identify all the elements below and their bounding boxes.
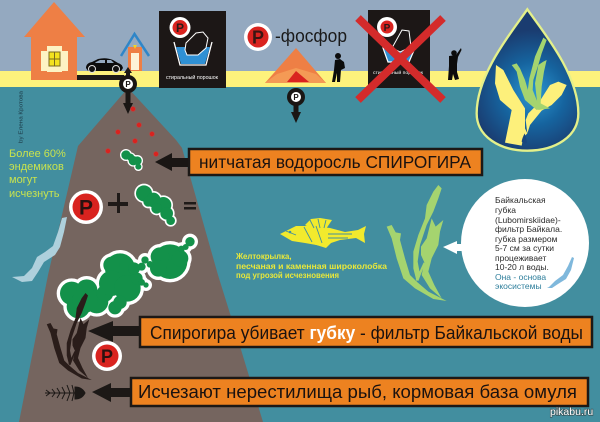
text: endemics warning: эндемиков bbox=[9, 161, 64, 173]
icon: hiker bbox=[332, 53, 345, 82]
watermark: pikabu.ru bbox=[550, 406, 593, 418]
callout: Baikal sponge info: Она - основа bbox=[495, 272, 546, 282]
arrow: sponge info bbox=[443, 241, 475, 254]
icon: fish skeleton bbox=[45, 385, 85, 401]
icon: large spirogyra bbox=[60, 237, 195, 318]
label: sponge bbox=[140, 317, 592, 347]
icon: phosphorus sign: P bbox=[252, 28, 264, 48]
icon: phosphorus marker from tent bbox=[287, 88, 305, 123]
icon: phosphorus circle lower: P bbox=[101, 346, 113, 366]
icon: detergent box bbox=[159, 11, 226, 88]
icon: dead sponge bbox=[47, 293, 92, 380]
arrow: to sponge label bbox=[88, 321, 140, 342]
callout: Baikal sponge info: экосистемы bbox=[495, 281, 542, 291]
legend: phosphorus: -фосфор bbox=[275, 26, 347, 46]
plus sign bbox=[108, 193, 128, 213]
pollution plume bbox=[19, 88, 263, 422]
label: spawning grounds bbox=[131, 378, 588, 406]
icon: large house bbox=[24, 2, 85, 80]
icon: Baikal map left bbox=[12, 217, 67, 282]
label: sponge: Спирогира убивает губку - фильтр Байкальской воды bbox=[150, 323, 583, 343]
text: fish warning: под угрозой исчезновения bbox=[236, 271, 339, 280]
icon: tent bbox=[265, 48, 326, 83]
arrow: to spirogyra label bbox=[155, 153, 190, 171]
icon: yellow fish bbox=[280, 218, 366, 248]
callout: Baikal sponge info: Байкальская bbox=[495, 195, 546, 205]
callout: Baikal sponge info: 5-7 см за сутки bbox=[495, 243, 554, 253]
callout: Baikal sponge info: фильтр Байкала. bbox=[495, 224, 562, 234]
icon: crossed-out detergent box: стиральный порошок bbox=[373, 69, 423, 75]
icon: phosphorus marker from tent: P bbox=[293, 93, 299, 102]
equals sign bbox=[184, 202, 196, 210]
lake water bbox=[0, 87, 600, 422]
icon: phosphorus circle lower bbox=[92, 341, 122, 371]
label: spirogyra: нитчатая водоросль СПИРОГИРА bbox=[199, 152, 471, 172]
text: fish warning: песчаная и каменная широколобка bbox=[236, 262, 388, 271]
text: endemics warning bbox=[9, 148, 66, 200]
icon: crossed-out detergent box bbox=[358, 10, 443, 100]
icon: crossed-out detergent box: P bbox=[384, 23, 391, 34]
icon: water drop with hands and algae bbox=[477, 9, 578, 151]
credit: by Елена Кротова bbox=[18, 90, 24, 143]
text: fish warning: Желтокрылка, bbox=[235, 252, 292, 261]
icon: medium spirogyra bbox=[134, 184, 177, 227]
icon: small spirogyra bbox=[120, 149, 143, 171]
callout: Baikal sponge info: процеживает bbox=[495, 253, 546, 263]
label: стиральный порошок bbox=[166, 74, 219, 81]
icon: healthy sponge bbox=[387, 185, 447, 301]
callout: Baikal sponge info: (Lubomirskiidae)- bbox=[495, 215, 561, 225]
callout: Baikal sponge info bbox=[461, 179, 589, 307]
callout: Baikal sponge info: губка размером bbox=[495, 234, 558, 244]
icon: detergent box: P bbox=[176, 21, 184, 35]
text: endemics warning: исчезнуть bbox=[9, 188, 60, 200]
drain pipe bbox=[77, 75, 124, 80]
icon: phosphorus sign bbox=[244, 23, 272, 51]
icon: Baikal map right bbox=[547, 257, 574, 288]
icon: small house bbox=[121, 34, 149, 71]
phosphorus particles bbox=[106, 106, 158, 156]
label: spawning grounds: Исчезают нерестилища рыб, кормовая база омуля bbox=[138, 382, 577, 402]
text: endemics warning: могут bbox=[9, 174, 37, 186]
icon: phosphorus circle: P bbox=[79, 196, 93, 220]
arrow: to fish label bbox=[92, 383, 131, 402]
icon: phosphorus circle bbox=[69, 190, 103, 224]
shore band bbox=[0, 71, 600, 88]
sky background bbox=[0, 0, 600, 72]
icon: upward arrow to drain bbox=[124, 67, 132, 79]
callout: Baikal sponge info: 10-20 л воды. bbox=[495, 262, 549, 272]
text: endemics warning: Более 60% bbox=[9, 148, 66, 160]
icon: person pointing bbox=[448, 48, 462, 80]
icon: phosphorus marker from shore bbox=[119, 75, 137, 114]
text: fish warning bbox=[235, 252, 388, 280]
icon: car bbox=[86, 58, 123, 72]
callout: Baikal sponge info: губка bbox=[495, 205, 516, 215]
icon: phosphorus marker from shore: P bbox=[125, 80, 131, 89]
